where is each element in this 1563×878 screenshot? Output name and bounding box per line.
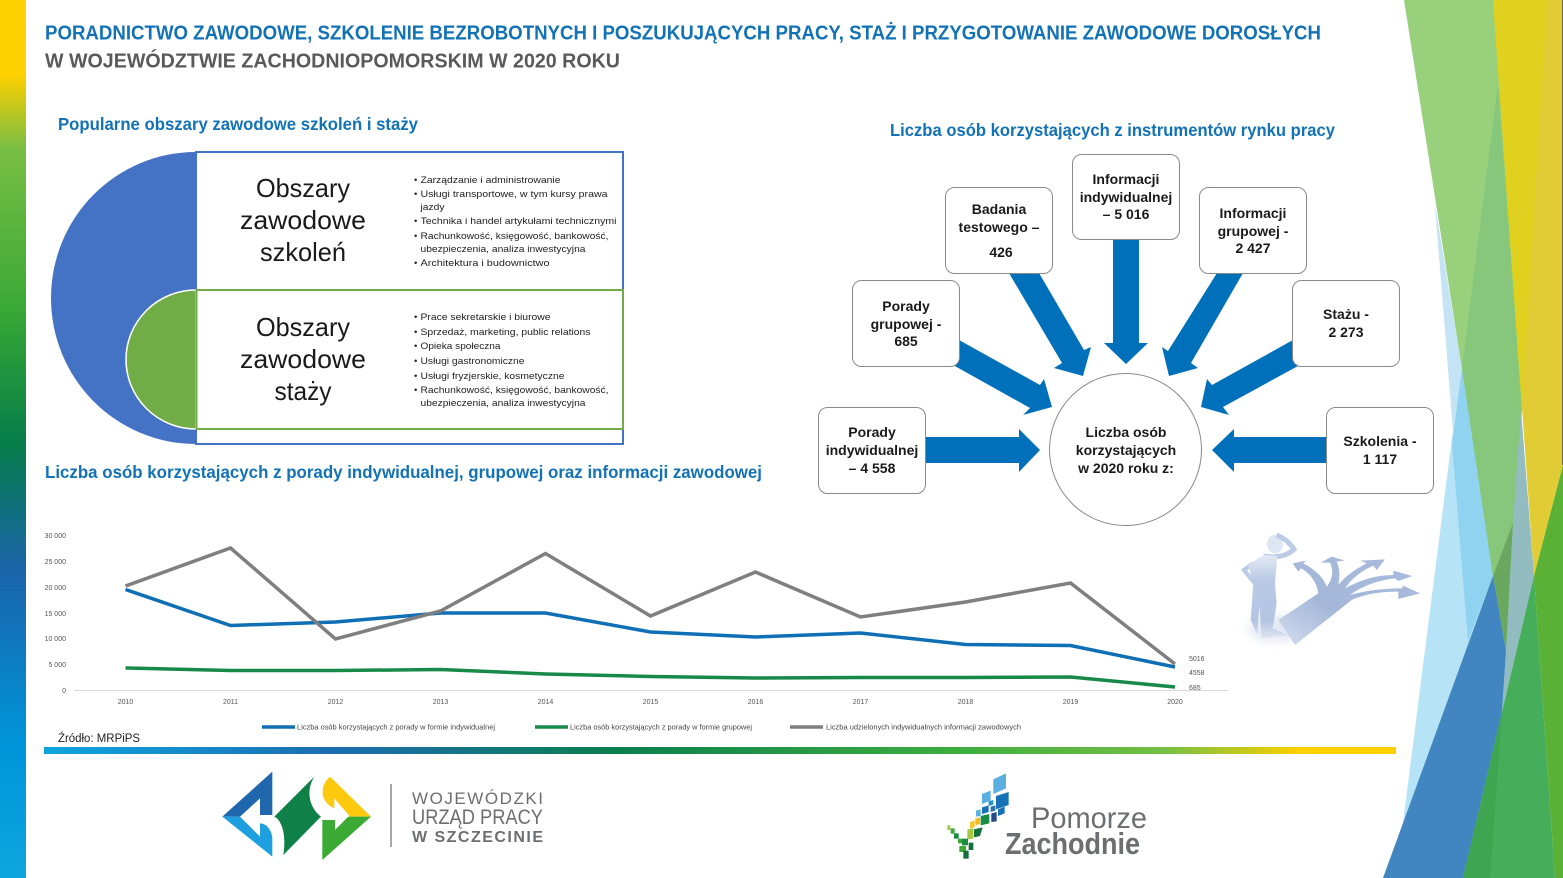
line chart [45, 533, 1228, 732]
training areas label: Obszary [256, 173, 350, 203]
internship areas list: Prace sekretarskie i biurowe [420, 312, 550, 323]
end value labels [1189, 656, 1205, 692]
left gradient bar [0, 0, 26, 878]
arrow: group information [1162, 273, 1243, 376]
x axis labels: 2017 [853, 699, 868, 706]
series: individual information [126, 548, 1175, 664]
internship areas list: • [414, 356, 417, 367]
internship areas list: • [414, 385, 417, 396]
x axis labels: 2014 [538, 699, 553, 706]
legend: Liczba osób korzystających z porady w formie grupowej [570, 724, 752, 732]
box: group advice: grupowej - [871, 316, 942, 332]
y axis labels: 25 000 [45, 559, 66, 566]
heading: line chart: Liczba osób korzystających z porady indywidualnej, grupowej oraz informacji zawodowej [45, 462, 762, 482]
internship areas list: Opieka społeczna [420, 341, 501, 352]
training areas list [414, 175, 616, 269]
box: group information [1200, 188, 1306, 274]
y axis labels: 0 [62, 688, 66, 695]
bottom gradient bar [44, 747, 1396, 754]
logo divider [390, 784, 392, 847]
box: testing: testowego – [959, 219, 1040, 235]
box: individual information: Informacji [1093, 171, 1159, 187]
legend: Liczba udzielonych indywidualnych informacji zawodowych [826, 724, 1021, 732]
legend: Liczba osób korzystających z porady w formie indywidualnej [297, 724, 495, 732]
x axis labels: 2020 [1167, 699, 1183, 706]
logo: Pomorze Zachodnie: Zachodnie [1005, 826, 1140, 861]
training areas list: Architektura i budownictwo [420, 258, 550, 269]
box: testing: 426 [989, 244, 1013, 260]
internship areas list: Sprzedaż, marketing, public relations [420, 327, 591, 338]
training areas list: Zarządzanie i administrowanie [420, 175, 560, 186]
logo mark [222, 772, 371, 860]
centre circle: korzystających [1076, 442, 1176, 458]
box: testing: Badania [972, 201, 1026, 217]
blue half circle [51, 152, 196, 444]
figure [1244, 535, 1420, 645]
x axis labels: 2011 [223, 699, 238, 706]
box: individual information: – 5 016 [1103, 206, 1150, 222]
internship areas list: Rachunkowość, księgowość, bankowość, [420, 385, 608, 396]
box: group information: grupowej - [1218, 223, 1289, 239]
training areas label: szkoleń [260, 237, 346, 267]
box: training: Szkolenia - [1343, 433, 1417, 449]
internship areas label: zawodowe [240, 344, 366, 374]
training areas list: • [414, 216, 417, 227]
training areas list: jazdy [419, 202, 445, 213]
internship areas label: staży [274, 376, 332, 406]
right decorative facets [1383, 0, 1563, 878]
box: individual advice: – 4 558 [849, 460, 896, 476]
title [45, 22, 1321, 72]
x axis labels: 2010 [118, 699, 133, 706]
training areas list: • [414, 258, 417, 269]
box: group information: Informacji [1220, 205, 1286, 221]
logo: Pomorze Zachodnie [947, 773, 1147, 861]
box: individual information [1072, 154, 1180, 240]
y axis labels: 15 000 [45, 611, 66, 618]
box: individual advice: indywidualnej [826, 442, 918, 458]
x axis labels: 2012 [328, 699, 343, 706]
training areas label: zawodowe [240, 205, 366, 235]
x axis labels: 2018 [958, 699, 973, 706]
training areas list: Rachunkowość, księgowość, bankowość, [420, 231, 608, 242]
internship areas list: • [414, 312, 417, 323]
training areas label [240, 173, 366, 267]
internship areas list: Usługi gastronomiczne [420, 356, 524, 367]
box: individual advice [818, 408, 926, 494]
radial diagram [818, 154, 1434, 526]
training areas list: Technika i handel artykułami technicznymi [420, 216, 616, 227]
internship areas list: Usługi fryzjerskie, kosmetyczne [420, 371, 564, 382]
y axis labels: 20 000 [45, 585, 66, 592]
arrow: internship [1201, 340, 1298, 415]
logo text: W SZCZECINIE [412, 829, 543, 846]
training areas list: • [414, 175, 417, 186]
road with arrows [1278, 557, 1420, 645]
box: internship: 2 273 [1328, 324, 1364, 340]
internship areas label: Obszary [256, 312, 350, 342]
y axis labels [45, 533, 66, 695]
x axis labels: 2013 [433, 699, 448, 706]
x axis labels: 2015 [643, 699, 658, 706]
centre circle: w 2020 roku z: [1077, 460, 1174, 476]
centre circle [1050, 374, 1202, 526]
arrow: testing [1009, 273, 1091, 376]
box: group advice: Porady [882, 298, 930, 314]
logo: Wojewódzki Urząd Pracy [222, 772, 543, 860]
green frame [196, 290, 623, 429]
arrow: group advice [953, 340, 1052, 415]
series: individual advice [126, 590, 1175, 667]
green half circle [126, 290, 196, 429]
internship areas label [240, 312, 366, 406]
internship areas list: • [414, 371, 417, 382]
logo text: WOJEWÓDZKI [412, 789, 543, 808]
logo mark [947, 773, 1009, 859]
internship areas list [414, 312, 608, 409]
internship areas list: • [414, 341, 417, 352]
box: internship [1292, 280, 1400, 366]
box: training [1326, 408, 1434, 494]
training areas list: Usługi transportowe, w tym kursy prawa [420, 189, 608, 200]
source note: Źródło: MRPiPS [58, 732, 140, 745]
box: group information: 2 427 [1235, 240, 1271, 256]
box: training: 1 117 [1363, 451, 1397, 467]
arrow: individual information [1104, 239, 1148, 364]
logo text [412, 789, 543, 846]
box: internship: Stażu - [1323, 306, 1369, 322]
logo text: Pomorze [1031, 802, 1147, 835]
logo text: URZĄD PRACY [412, 806, 543, 829]
person [1244, 535, 1294, 638]
end value labels: 685 [1189, 685, 1201, 692]
centre circle: Liczba osób [1086, 424, 1166, 440]
title: W WOJEWÓDZTWIE ZACHODNIOPOMORSKIM W 2020 ROKU [45, 48, 620, 72]
arrow: training [1212, 429, 1326, 472]
box: individual information: indywidualnej [1080, 189, 1172, 205]
y axis labels: 5 000 [48, 662, 66, 669]
soft glow [1248, 615, 1305, 642]
training areas list: • [414, 189, 417, 200]
end value labels: 4558 [1189, 670, 1205, 677]
box: individual advice: Porady [848, 424, 896, 440]
panel: popular areas diagram [51, 152, 623, 444]
internship areas list: ubezpieczenia, analiza inwestycyjna [420, 398, 586, 409]
title: PORADNICTWO ZAWODOWE, SZKOLENIE BEZROBOTNYCH I POSZUKUJĄCYCH PRACY, STAŻ I PRZYGOTOWANIE ZAWODOWE DOROSŁYCH [45, 22, 1321, 44]
x axis labels [118, 699, 1183, 706]
training areas list: • [414, 231, 417, 242]
end value labels: 5016 [1189, 656, 1205, 663]
heading: labour market instruments: Liczba osób korzystających z instrumentów rynku pracy [890, 120, 1335, 140]
arrow: individual advice [925, 429, 1040, 472]
x axis labels: 2016 [748, 699, 763, 706]
box: testing [946, 188, 1052, 274]
training areas list: ubezpieczenia, analiza inwestycyjna [420, 244, 586, 255]
x axis labels: 2019 [1063, 699, 1078, 706]
box: group advice: 685 [894, 333, 918, 349]
heading: popular areas: Popularne obszary zawodowe szkoleń i staży [58, 114, 418, 134]
box: group advice [852, 280, 960, 366]
y axis labels: 10 000 [45, 636, 66, 643]
y axis labels: 30 000 [45, 533, 66, 540]
internship areas list: • [414, 327, 417, 338]
blue frame [196, 152, 623, 444]
icon: person at crossroads [1244, 535, 1420, 645]
legend [262, 724, 1021, 732]
series: group advice [126, 668, 1175, 687]
